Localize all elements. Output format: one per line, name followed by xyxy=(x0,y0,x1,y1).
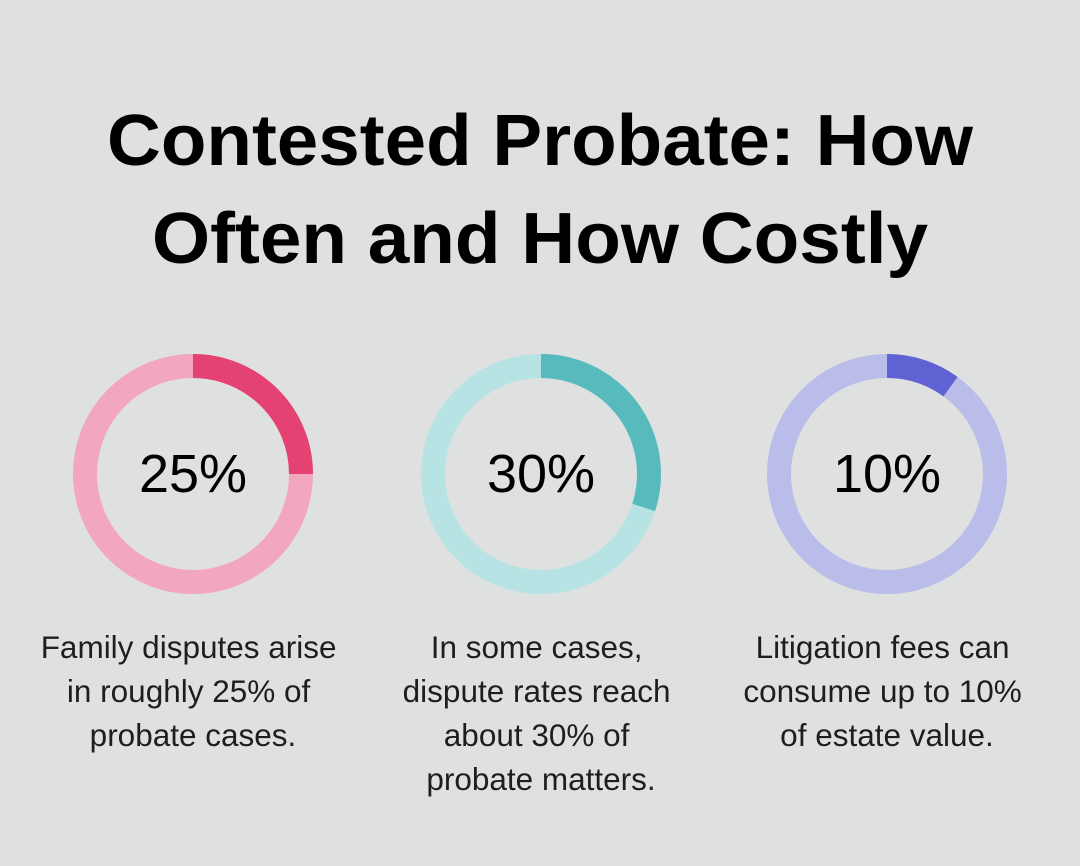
donut chart: 30% xyxy=(433,366,649,582)
stat: 30%: 30% xyxy=(487,444,595,504)
caption: litigation fees: Litigation fees can xyxy=(756,629,1010,665)
caption: dispute rates: dispute rates reach xyxy=(403,673,671,709)
stat: 10%: 10% xyxy=(833,444,941,504)
caption: dispute rates: In some cases, xyxy=(431,629,643,665)
caption: family disputes: Family disputes arise xyxy=(41,629,337,665)
caption: dispute rates: probate matters. xyxy=(426,761,656,797)
title: Contested Probate: How xyxy=(107,101,974,181)
panel: 25% xyxy=(41,366,345,753)
caption: family disputes: in roughly 25% of xyxy=(67,673,311,709)
caption: family disputes: probate cases. xyxy=(90,717,296,753)
panel: 10% xyxy=(743,366,1031,753)
donut chart: 25% xyxy=(85,366,301,582)
panel: 30% xyxy=(403,366,679,797)
title xyxy=(107,101,974,279)
caption: litigation fees: of estate value. xyxy=(780,717,994,753)
caption: dispute rates: about 30% of xyxy=(444,717,630,753)
title: Often and How Costly xyxy=(152,199,928,279)
donut chart: 10% xyxy=(779,366,995,582)
caption: litigation fees: consume up to 10% xyxy=(743,673,1022,709)
stat: 25%: 25% xyxy=(139,444,247,504)
